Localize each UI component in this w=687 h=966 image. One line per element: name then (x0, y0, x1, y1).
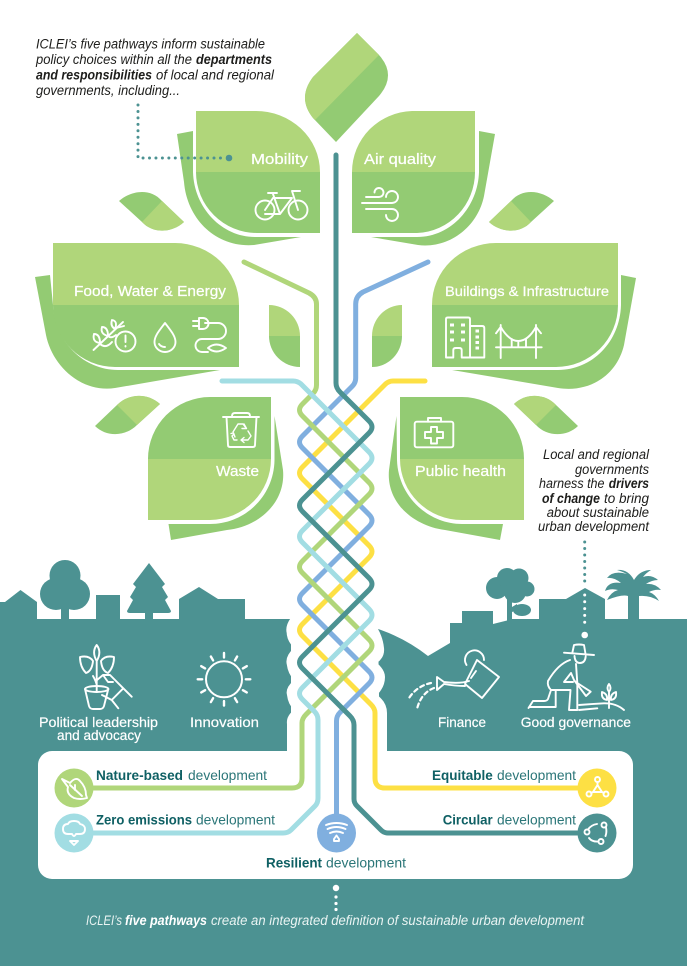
pathway: nature-based (54, 767, 267, 808)
annotation: departments and responsibilities (35, 36, 275, 98)
label: waste: Waste (216, 463, 259, 480)
label: resilient development (266, 855, 406, 871)
leaf: food, water and energy (35, 243, 239, 389)
icon circle: cycle (578, 814, 616, 852)
label: equitable development (432, 767, 576, 783)
label: zero emissions development: development (196, 811, 275, 827)
label: buildings and infrastructure: Buildings & Infrastructure (445, 283, 609, 299)
icon: hand planting (80, 645, 132, 709)
driver: political leadership and advocacy (39, 645, 158, 743)
icon: wind (362, 188, 398, 221)
annotation: departments and responsibilities: governments, including... (36, 83, 180, 98)
label: air quality: Air quality (364, 151, 437, 168)
icon: bridge (496, 325, 542, 358)
annotation: departments and responsibilities: ICLEI’s five pathways inform sustainable (36, 36, 265, 52)
small inner leaf: right (372, 305, 402, 367)
top leaf (305, 33, 388, 142)
annotation: drivers of change: about sustainable (547, 505, 649, 520)
leaf: public health (389, 397, 524, 540)
label: resilient development: Resilient (266, 855, 322, 871)
annotation: drivers of change (538, 447, 650, 534)
icon: buildings (446, 318, 484, 358)
annotation: drivers of change: harness the (539, 476, 604, 491)
strand: zero emissions light blue (74, 381, 372, 833)
annotation: departments and responsibilities: and responsibilities (36, 68, 152, 82)
label: political leadership: Political leadership (39, 714, 158, 730)
leaf: buildings and infrastructure (432, 243, 636, 389)
dotted connector: panel to caption (333, 885, 339, 911)
label: good governance: Good governance (521, 714, 631, 730)
label: innovation: Innovation (190, 714, 259, 730)
annotation: departments and responsibilities: policy choices within all the (35, 52, 192, 67)
label: mobility: Mobility (251, 151, 309, 168)
label: finance: Finance (438, 714, 486, 730)
icon: watering can (409, 650, 499, 709)
annotation: drivers of change: drivers (609, 476, 649, 491)
icon: wheat with alert (94, 320, 136, 352)
leaf: waste (148, 397, 283, 540)
label: nature-based development: development (188, 767, 267, 783)
strand: equitable yellow (300, 381, 597, 788)
label: nature-based development: Nature-based (96, 767, 183, 783)
small inner leaf: left (269, 305, 300, 367)
driver: good governance (521, 644, 631, 730)
label: circular development (443, 811, 576, 827)
label: equitable development: development (497, 767, 576, 783)
small leaf: lower left (95, 396, 160, 434)
caption: five pathways definition: ICLEI’s (86, 913, 122, 928)
icon: gardener (528, 644, 624, 710)
pathway: equitable (432, 767, 616, 808)
label: zero emissions development (96, 811, 275, 827)
icon: sun (198, 653, 250, 706)
annotation: departments and responsibilities: of local and regional (156, 68, 275, 82)
strand: circular teal (300, 155, 597, 833)
pathway: resilient (266, 814, 406, 871)
small leaf: lower right (514, 396, 578, 434)
label: circular development: development (497, 811, 576, 827)
strand: resilient blue (300, 262, 428, 815)
label: public health: Public health (415, 463, 506, 480)
leaf: air quality (352, 111, 495, 245)
label: circular development: Circular (443, 811, 493, 827)
label: equitable development: Equitable (432, 767, 493, 783)
driver: finance (409, 650, 499, 730)
caption: five pathways definition: create an integrated definition of sustainable urban development (211, 913, 585, 928)
icon circle: waves (317, 814, 356, 852)
annotation: drivers of change: governments (575, 462, 649, 477)
icon: water drop (154, 323, 176, 352)
caption: five pathways definition: five pathways (125, 913, 207, 928)
label: food, water and energy: Food, Water & Energy (74, 283, 227, 300)
label: and advocacy: and advocacy (57, 727, 141, 743)
palm tree (605, 570, 661, 620)
annotation: departments and responsibilities: departments (196, 52, 272, 67)
panel: five pathways (38, 751, 633, 879)
small leaf: upper left (119, 192, 184, 231)
pathway: circular (443, 811, 616, 852)
pathway: zero emissions (54, 811, 275, 852)
dotted connector: drivers annotation to gardener (581, 542, 588, 638)
ground and skyline (0, 560, 687, 966)
white channel around braid (286, 618, 387, 760)
pine tree (127, 563, 171, 620)
annotation: drivers of change: of change (542, 491, 600, 506)
label: zero emissions development: Zero emissions (96, 811, 192, 827)
icon: recycling bin (223, 413, 259, 447)
icon circle: cloud (54, 814, 94, 852)
icon circle: leaf (54, 768, 94, 808)
icon: medical kit (415, 418, 453, 447)
annotation: drivers of change: Local and regional (543, 447, 650, 462)
broadleaf tree right (486, 568, 534, 622)
braid of five pathway strands (74, 155, 597, 833)
label: resilient development: development (326, 855, 406, 871)
deciduous tree left (40, 560, 90, 620)
annotation: drivers of change: to bring (604, 491, 649, 506)
strand: nature green (74, 262, 372, 788)
label: nature-based development (96, 767, 267, 783)
driver: innovation (190, 653, 259, 730)
icon: energy plug (193, 318, 226, 352)
small leaf: upper right (489, 192, 554, 231)
annotation: drivers of change: urban development (538, 519, 650, 534)
leaf: mobility (177, 111, 320, 245)
icon circle: network (578, 768, 616, 808)
icon: bicycle (256, 191, 308, 220)
dotted connector: top annotation to mobility leaf (138, 105, 232, 161)
